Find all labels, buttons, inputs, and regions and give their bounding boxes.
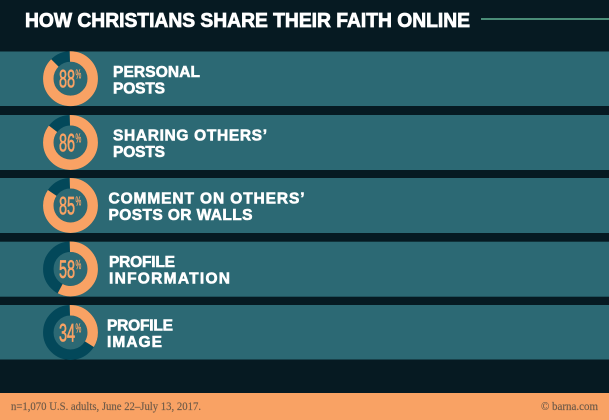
copyright: © barna.com xyxy=(541,401,598,413)
panel: sharing others' posts xyxy=(0,115,609,170)
label xyxy=(108,190,304,224)
label: COMMENT ON OTHERS’ xyxy=(108,190,304,208)
panel: personal posts xyxy=(0,52,609,106)
title rule xyxy=(481,18,609,20)
label: SHARING OTHERS’ xyxy=(113,128,267,144)
panel: profile information xyxy=(0,242,609,297)
donut: 58%: 58 xyxy=(59,257,75,284)
donut: 88% xyxy=(48,56,93,101)
donut: 58%: % xyxy=(76,259,81,273)
donut: 86% xyxy=(48,120,93,165)
label: POSTS xyxy=(113,144,165,161)
donut: 88%: % xyxy=(76,68,81,82)
label xyxy=(113,128,267,161)
donut: 86%: 86 xyxy=(59,131,75,157)
label: PROFILE xyxy=(107,318,173,334)
sample note: n=1,070 U.S. adults, June 22–July 13, 2017. xyxy=(11,401,201,413)
donut: 85%: % xyxy=(76,195,81,209)
donut: 85%: 85 xyxy=(59,194,75,220)
title: HOW CHRISTIANS SHARE THEIR FAITH ONLINE xyxy=(25,9,470,32)
donut: 34% xyxy=(48,310,93,355)
label: PROFILE xyxy=(109,254,175,271)
footer xyxy=(0,393,609,420)
donut: 85% xyxy=(48,183,93,228)
donut: 86%: % xyxy=(76,132,81,146)
label xyxy=(107,318,173,351)
donut: 88%: 88 xyxy=(59,67,75,94)
donut: 34%: % xyxy=(76,322,81,336)
label xyxy=(113,64,200,98)
label: IMAGE xyxy=(107,334,162,351)
label xyxy=(109,254,230,288)
label: POSTS OR WALLS xyxy=(108,207,252,224)
label: INFORMATION xyxy=(109,270,230,288)
donut: 58% xyxy=(48,247,93,291)
label: POSTS xyxy=(113,80,165,98)
panel: profile image xyxy=(0,305,609,360)
label: PERSONAL xyxy=(113,64,200,81)
donut: 34%: 34 xyxy=(59,321,75,347)
panel: comment on others' posts xyxy=(0,178,609,233)
